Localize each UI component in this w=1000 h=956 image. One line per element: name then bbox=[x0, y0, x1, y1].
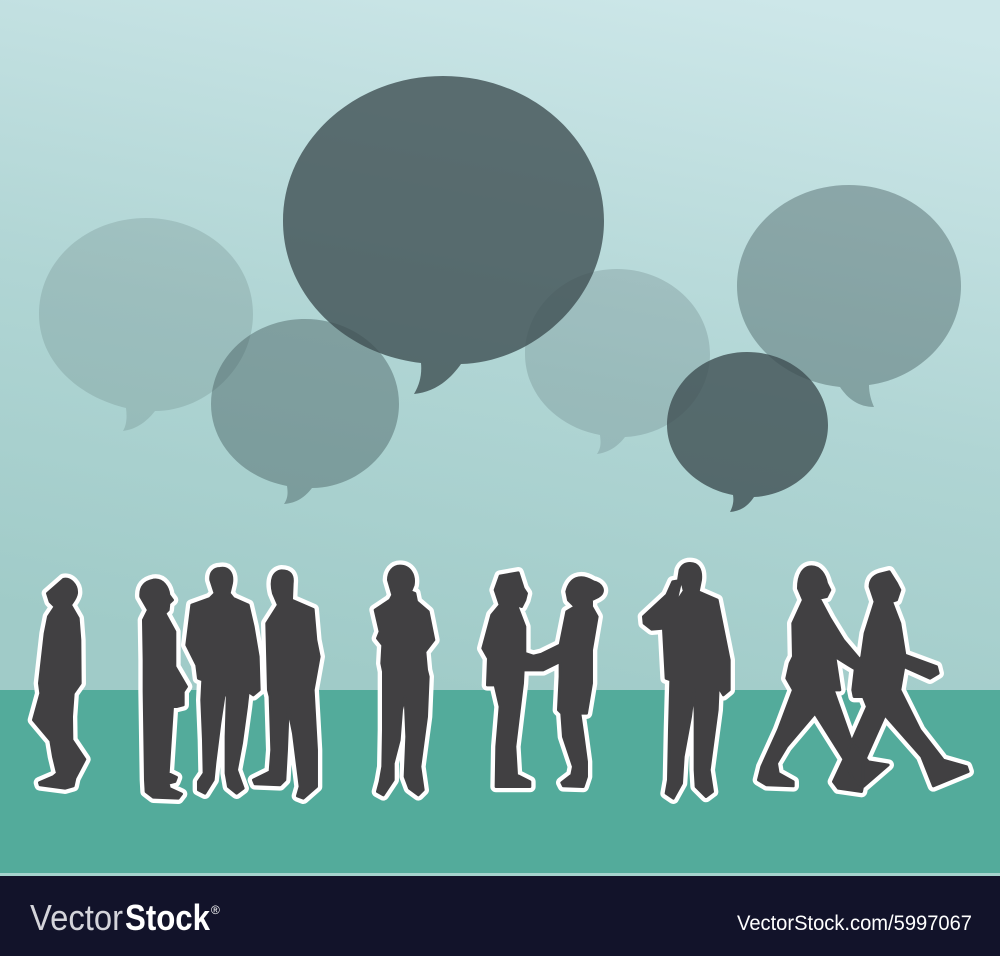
speech bubble: far left bbox=[39, 218, 253, 431]
speech bubble: lower left bbox=[211, 319, 399, 504]
image id text: VectorStock.com/5997067 bbox=[737, 912, 972, 935]
person: man arms crossed bbox=[375, 566, 434, 795]
person: profile man bbox=[141, 580, 187, 798]
person: walking left figure bbox=[33, 579, 85, 788]
logo: VectorStock: Vector bbox=[30, 897, 123, 938]
speech bubble: far right bbox=[737, 185, 961, 407]
person: man front view bbox=[187, 568, 259, 793]
person: man hands in pockets bbox=[253, 571, 319, 798]
speech bubble: small right dark bbox=[667, 352, 828, 512]
logo: VectorStock bbox=[30, 897, 220, 938]
logo: VectorStock: ® bbox=[211, 903, 220, 917]
speech bubble: large center bbox=[283, 76, 604, 394]
person: man on phone bbox=[643, 563, 729, 798]
footer bar bbox=[0, 873, 1000, 956]
speech bubble: center right bbox=[525, 269, 710, 454]
background sky bbox=[0, 0, 1000, 690]
logo: VectorStock: Stock bbox=[125, 897, 211, 938]
floor bbox=[0, 690, 1000, 874]
people: handshake pair bbox=[483, 573, 603, 787]
people: two men walking bbox=[758, 567, 968, 792]
